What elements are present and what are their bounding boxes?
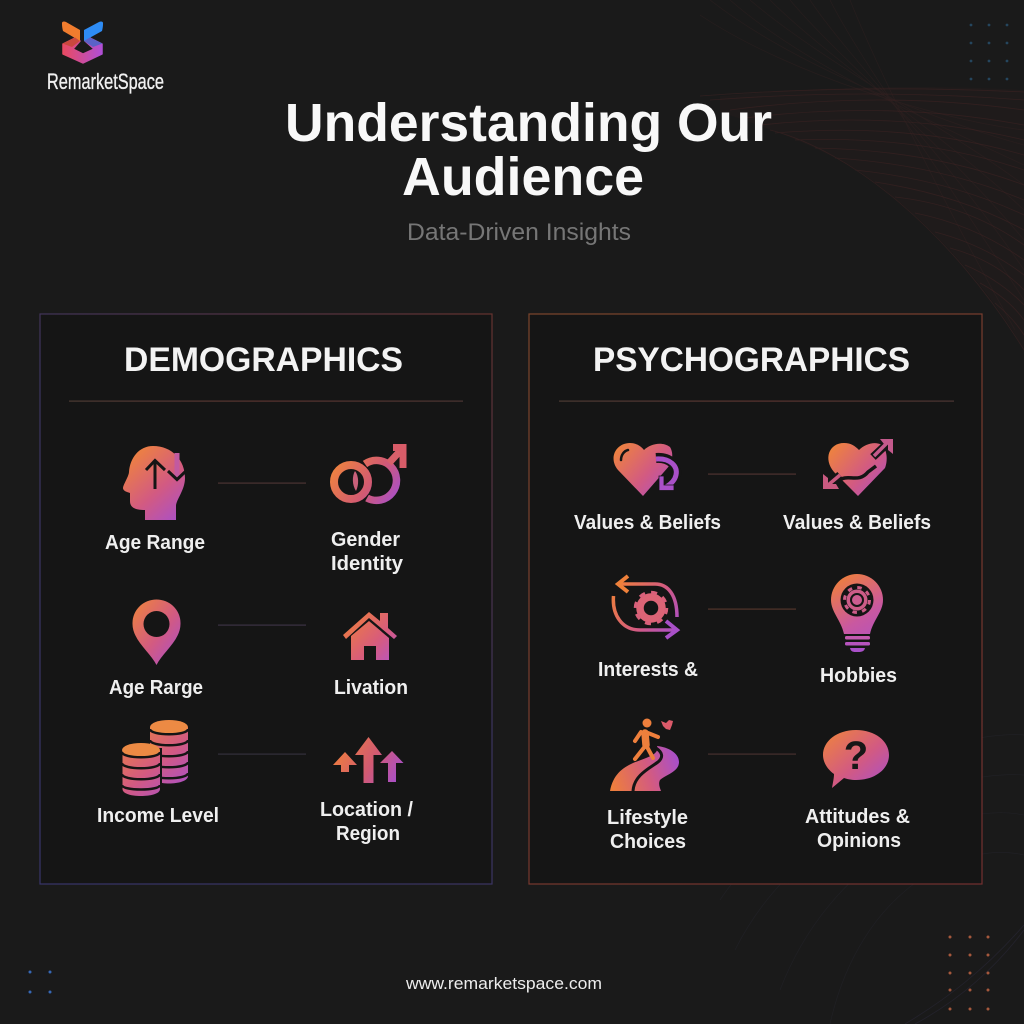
icon: coin stacks [122, 720, 188, 796]
icon: speech bubble with question mark [823, 730, 889, 788]
icon: loop arrows with gear [613, 576, 677, 638]
decorative dots: bottom left [28, 970, 52, 994]
icon: head with age arrows [123, 446, 186, 520]
logo: RemarketSpace [47, 69, 164, 94]
label: location / region [320, 799, 413, 845]
label: lifestyle choices: Choices [610, 831, 686, 853]
icon: house [343, 612, 397, 660]
heading: demographics: DEMOGRAPHICS [124, 341, 403, 379]
footer url: www.remarketspace.com [405, 975, 602, 993]
icon: heart with return arrow [614, 443, 676, 496]
icon: light bulb with gear [831, 574, 883, 652]
label: lifestyle choices: Lifestyle [607, 807, 688, 829]
icon: speech bubble with question mark: ? [844, 734, 868, 778]
panel: psychographics [529, 314, 982, 884]
background mesh: upper right band tint [720, 87, 1024, 350]
title [285, 93, 772, 207]
icon: three up arrows [333, 737, 404, 783]
label: location / region: Location / [320, 799, 413, 821]
label: gender identity [331, 529, 404, 575]
label: attitudes and opinions: Opinions [817, 830, 901, 852]
icon: heart with double arrow [823, 439, 893, 496]
label: values and beliefs: Values & Beliefs [574, 512, 721, 534]
label: attitudes and opinions: Attitudes & [805, 806, 910, 828]
background mesh: diagonal curves [700, 0, 1024, 330]
label: gender identity: Identity [331, 553, 404, 575]
background mesh: lower right curves [905, 925, 1024, 1024]
decorative dots: bottom right [948, 936, 990, 1010]
background mesh: faint lower arcs [720, 735, 1024, 1024]
label: location / region: Region [336, 823, 400, 845]
subtitle: Data-Driven Insights [407, 219, 631, 246]
icon: location pin [132, 600, 181, 665]
label: age rarge: Age Rarge [109, 677, 203, 699]
background mesh: upper right curves [700, 89, 1024, 350]
title: Understanding Our [285, 93, 772, 153]
label: lifestyle choices [607, 807, 688, 853]
label: income level: Income Level [97, 805, 219, 827]
label: age range: Age Range [105, 532, 205, 554]
label: values and beliefs (second): Values & Beliefs [783, 512, 931, 534]
label: hobbies: Hobbies [820, 665, 897, 687]
label: gender identity: Gender [331, 529, 400, 551]
label: interests: Interests & [598, 659, 698, 681]
label: livation: Livation [334, 677, 408, 699]
title: Audience [402, 147, 644, 207]
icon: person walking on a path [610, 718, 679, 791]
label: attitudes and opinions [805, 806, 910, 852]
heading: psychographics: PSYCHOGRAPHICS [593, 341, 910, 379]
icon: gender symbols [329, 448, 403, 504]
logo [47, 21, 164, 94]
decorative dots: top right [970, 24, 1008, 80]
panel: demographics [40, 314, 492, 884]
